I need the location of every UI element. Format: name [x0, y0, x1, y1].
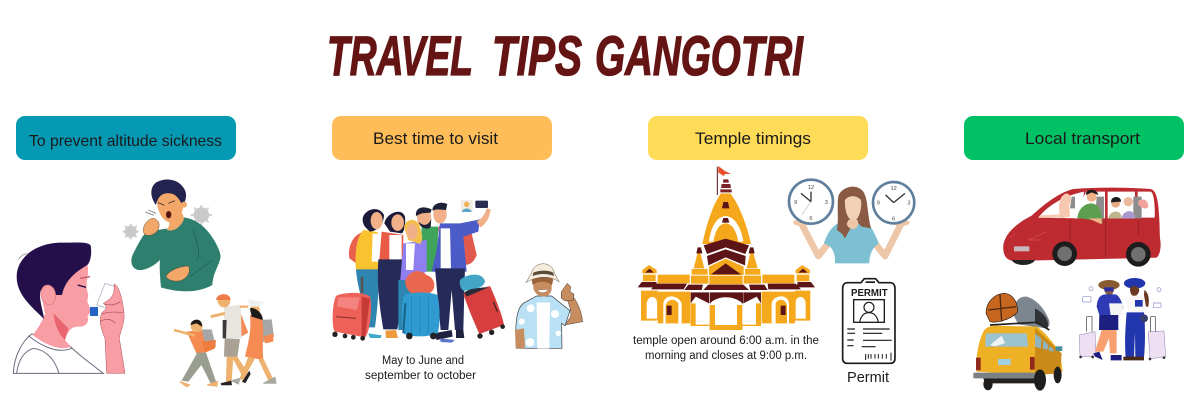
heading: temple timings	[648, 116, 868, 160]
panel: temple timings	[633, 116, 914, 386]
heading: local transport	[964, 116, 1184, 160]
panel: best time to visit	[332, 116, 583, 382]
text: best time dates: May to June and	[382, 355, 464, 367]
illustration: man using inhaler	[13, 242, 125, 373]
heading: to prevent altitude sickness: To prevent altitude sickness	[29, 133, 222, 150]
illustration: woman holding clocks: 6	[809, 216, 813, 222]
illustration: woman holding clocks: 12	[890, 186, 897, 192]
heading: temple timings: Temple timings	[695, 130, 811, 148]
illustration: coughing man	[123, 180, 221, 291]
illustration: woman holding clocks: 3	[907, 201, 911, 207]
heading: to prevent altitude sickness	[16, 116, 236, 160]
heading: local transport: Local transport	[1025, 130, 1140, 148]
illustration: red van with passengers	[1003, 188, 1161, 267]
illustration: gangotri temple	[638, 166, 815, 330]
title: TRAVEL	[327, 24, 473, 87]
icon: permit card	[843, 279, 895, 363]
illustration: woman holding clocks	[789, 180, 914, 263]
text: permit label: Permit	[847, 369, 890, 386]
illustration: woman holding clocks: 3	[825, 200, 828, 206]
icon: permit card: PERMIT	[851, 288, 888, 299]
panel: local transport	[964, 116, 1184, 391]
panel: altitude sickness	[13, 116, 276, 387]
title	[327, 24, 804, 87]
illustration: woman holding clocks: 6	[892, 217, 895, 223]
illustration: woman holding clocks: 9	[877, 201, 880, 207]
text: temple opening hours: temple open around 6:00 a.m. in the	[633, 335, 819, 347]
text: best time dates	[365, 355, 476, 382]
text: temple opening hours: morning and closes at 9:00 p.m.	[645, 350, 807, 362]
illustration: selfie group with luggage	[332, 200, 505, 343]
heading: best time to visit	[332, 116, 552, 160]
text: best time dates: september to october	[365, 370, 476, 382]
title: TIPS	[492, 24, 582, 87]
illustration: hiking group	[174, 294, 276, 387]
title: GANGOTRI	[595, 24, 804, 87]
heading: best time to visit: Best time to visit	[373, 130, 498, 148]
illustration: yellow car with roof luggage	[973, 293, 1063, 391]
illustration: tourist thumbs up	[515, 264, 583, 348]
illustration: two tourists with suitcases	[1079, 278, 1166, 360]
text: temple opening hours	[633, 335, 819, 362]
illustration: woman holding clocks: 12	[808, 185, 814, 191]
illustration: woman holding clocks: 9	[794, 200, 797, 206]
